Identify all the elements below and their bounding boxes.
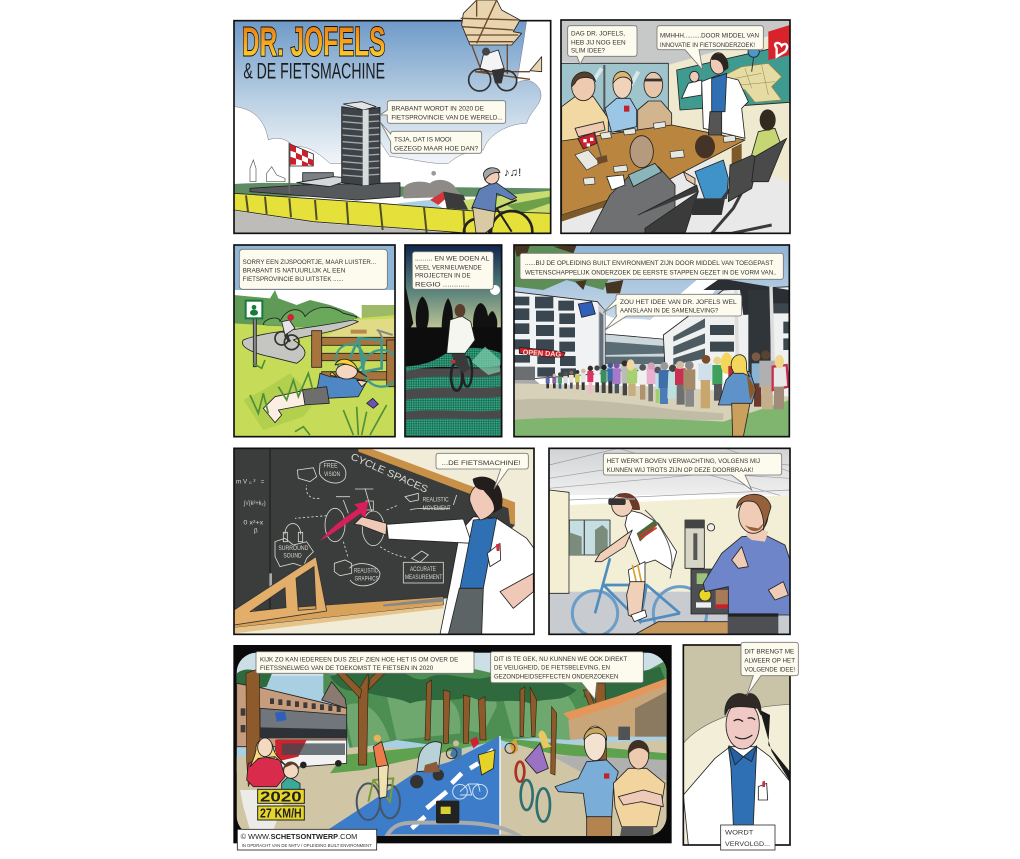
figure: distant cyclist bbox=[275, 314, 299, 350]
cycle highway scene bbox=[237, 653, 667, 837]
speech bubble: zijspoortje: FIETSPROVINCIE BIJ UITSTEK ...... bbox=[243, 276, 343, 283]
speed display: 2020 bbox=[258, 789, 304, 805]
chalk item: free vision: VISION bbox=[324, 471, 340, 478]
white lab coat bbox=[683, 747, 790, 845]
speech bubble: innovatie in fietsonderzoek bbox=[657, 26, 763, 70]
chalk item: realistic graphics bbox=[334, 560, 380, 586]
speech bubble: vernieuwende projecten bbox=[412, 252, 493, 289]
speech bubble: gezondheidseffecten: GEZONDHEIDSEFFECTEN ONDERZOEKEN bbox=[494, 673, 618, 680]
monitor bbox=[691, 569, 730, 614]
name cards on table bbox=[575, 122, 736, 185]
grass and iris flower bbox=[250, 360, 387, 435]
night scene bbox=[405, 245, 502, 437]
speech bubble: gezondheidseffecten bbox=[491, 652, 643, 699]
pink arrow bbox=[320, 501, 368, 541]
chalk formula: mV₀² = bbox=[236, 478, 265, 485]
speech bubble: slim idee: SLIM IDEE? bbox=[571, 48, 605, 55]
speech bubble: vernieuwende projecten: ......... EN WE DOEN AL bbox=[415, 256, 490, 263]
credit box: IN OPDRACHT VAN DE NHTV / OPLEIDING BUILT ENVIRONMENT bbox=[242, 843, 372, 848]
speech bubble: Brabant fietsprovincie: FIETSPROVINCIE VAN DE WERELD... bbox=[391, 114, 503, 121]
table bbox=[562, 125, 745, 215]
panel: title scene with provincial tower bbox=[234, 0, 551, 252]
speech bubble: de fietsmachine: ...DE FIETSMACHINE! bbox=[442, 460, 521, 467]
classroom scene bbox=[234, 448, 534, 634]
map screen bbox=[677, 25, 790, 110]
queue of people bbox=[546, 350, 788, 409]
icon: flying bicycle machine bbox=[461, 0, 542, 91]
figure: blond woman in blue jacket bbox=[718, 355, 756, 437]
panel: glowing road at dusk bbox=[405, 245, 502, 437]
chalk item: accurate measurement bbox=[403, 551, 443, 583]
person: man in back, blue shirt bbox=[683, 135, 772, 233]
panel: Dr. Jofels winking bbox=[683, 642, 798, 850]
speech bubble: vernieuwende projecten: PROJECTEN IN DE bbox=[415, 273, 471, 280]
countryside scene bbox=[234, 245, 400, 437]
chalk formula: ∫√(k²+k₂) bbox=[243, 500, 266, 507]
speech bubble: vernieuwende projecten: VEEL VERNIEUWENDE bbox=[415, 264, 482, 271]
speech bubble: fietssnelweg: KIJK ZO KAN IEDEREEN DUS ZELF ZIEN HOE HET IS OM OVER DE bbox=[260, 656, 459, 663]
chalk item: free vision bbox=[297, 460, 346, 483]
speech bubble: opleiding built environment: ......BIJ DE OPLEIDING BUILT ENVIRONMENT ZIJN DOOR MIDDEL VAN TOEGEPAST bbox=[525, 260, 773, 267]
chalk item: free vision: FREE bbox=[324, 463, 338, 470]
speech bubble: zijspoortje: BRABANT IS NATUURLIJK AL EEN bbox=[243, 268, 346, 275]
chalk item: realistic graphics: GRAPHICS bbox=[355, 575, 379, 582]
desk bbox=[635, 622, 732, 634]
Dr. Jofels at map bbox=[682, 53, 748, 138]
scene background bbox=[234, 21, 551, 252]
panel: fietssnelweg of the future bbox=[233, 645, 672, 850]
figure: man with thumbs up bbox=[703, 494, 790, 634]
blue shirt bbox=[728, 747, 757, 825]
speech bubble: hoe dan: GEZEGD MAAR HOE DAN? bbox=[394, 145, 479, 152]
houses right bbox=[568, 683, 667, 740]
panel: lab test on the bike bbox=[549, 448, 790, 640]
black cockpit frame bbox=[233, 645, 672, 843]
speech bubble: gezondheidseffecten: DIT IS TE GEK, NU KUNNEN WE OOK DIREKT bbox=[494, 656, 627, 663]
chalk item: surround sound: SOUND bbox=[283, 553, 302, 560]
chalk item: realistic movement bbox=[405, 493, 457, 512]
logo sign on building bbox=[578, 302, 595, 317]
panel: open day queue bbox=[514, 245, 789, 437]
speech bubble: gezondheidseffecten: DE VEILIGHEID, DE FIETSBELEVING, EN bbox=[494, 665, 610, 672]
panel: meeting room bbox=[561, 20, 790, 233]
chalk formula bbox=[236, 478, 266, 534]
title: Dr. Jofels: DR. JOFELS bbox=[242, 19, 385, 65]
figure: man in yellow shirt with arms crossed bbox=[613, 740, 665, 837]
handlebar and cycle computer bbox=[387, 801, 520, 837]
ground bbox=[514, 383, 788, 422]
meeting room scene bbox=[561, 20, 790, 233]
far building bbox=[605, 334, 673, 371]
figure: test rider on blue bicycle bbox=[572, 493, 707, 640]
figure: woman and girl on cargo bike bbox=[240, 738, 300, 830]
speech bubble: de fietsmachine bbox=[436, 453, 528, 489]
set square ruler bbox=[234, 557, 327, 625]
credit box bbox=[237, 829, 377, 850]
chalk item: surround sound: SURROUND bbox=[278, 545, 309, 552]
bus bbox=[273, 740, 347, 768]
chalk item: realistic movement: MOVEMENT bbox=[423, 505, 451, 512]
left building bbox=[514, 292, 605, 388]
banner: open dag: OPEN DAG bbox=[523, 348, 562, 359]
panel frame bbox=[234, 21, 551, 233]
campus scene bbox=[514, 245, 789, 437]
subtitle: & de fietsmachine: & DE FIETSMACHINE bbox=[243, 59, 385, 84]
door and wall clock bbox=[685, 520, 715, 568]
coat pocket and pen bbox=[758, 781, 768, 800]
head bbox=[725, 694, 761, 749]
panel: chalkboard Cycle Spaces bbox=[234, 448, 534, 634]
speech bubble: zijspoortje bbox=[239, 249, 387, 289]
speech bubble: slim idee bbox=[568, 26, 637, 64]
speech bubble: doorbraak: KUNNEN WIJ TROTS ZIJN OP DEZE DOORBRAAK! bbox=[607, 467, 753, 474]
ground and grass bbox=[237, 740, 667, 837]
speech bubble: innovatie in fietsonderzoek: INNOVATIE IN FIETSONDERZOEK! bbox=[660, 42, 755, 49]
figure: woman lying in grass bbox=[263, 359, 367, 423]
chalk item: surround sound bbox=[275, 524, 313, 567]
speech bubble: fietssnelweg bbox=[256, 652, 474, 673]
speech bubble: innovatie in fietsonderzoek: MMHHH..........DOOR MIDDEL VAN bbox=[660, 33, 759, 40]
speech bubble: aanslaan in de samenleving: AANSLAAN IN DE SAMENLEVING? bbox=[620, 308, 719, 315]
figure: velomobile rider bbox=[410, 742, 444, 788]
lab scene bbox=[549, 448, 790, 640]
caption: wordt vervolgd: WORDT bbox=[725, 829, 753, 836]
tree trunks bbox=[246, 667, 650, 787]
speech bubble: hoe dan bbox=[381, 123, 482, 153]
credit box: © WWW.SCHETSONTWERP.COM bbox=[241, 832, 357, 841]
chalk item: realistic movement: REALISTIC bbox=[423, 497, 449, 504]
window with view bbox=[569, 520, 610, 555]
wooden fence bbox=[312, 331, 395, 387]
chalk diagram: bicycle and arrows bbox=[295, 485, 407, 558]
speed display: 2020: 2020 bbox=[260, 789, 302, 805]
chalk formula: 0 x²+x bbox=[243, 519, 264, 526]
speech bubble: slim idee: HEB JIJ NOG EEN bbox=[571, 39, 626, 46]
chalk item: realistic graphics: REALISTIC bbox=[354, 567, 378, 574]
speech bubble: aanslaan in de samenleving bbox=[603, 294, 742, 330]
figure: Dr. Jofels on bicycle from behind bbox=[447, 304, 475, 391]
speech bubble: fietssnelweg: FIETSSNELWEG VAN DE TOEKOMST TE FIETSEN IN 2020 bbox=[260, 665, 434, 672]
portrait scene bbox=[683, 645, 790, 845]
icon: teal bicycle bbox=[336, 330, 400, 387]
speech bubble: volgende idee bbox=[741, 642, 798, 696]
speed display: 27 km/h: 27 KM/H bbox=[260, 807, 302, 821]
chalk item: accurate measurement: MEASUREMENT bbox=[405, 574, 442, 581]
figure: cyclist in orange bbox=[357, 735, 400, 820]
speech bubble: doorbraak: HET WERKT BOVEN VERWACHTING, VOLGENS MIJ bbox=[607, 458, 760, 465]
speech bubble: zijspoortje: SORRY EEN ZIJSPOORTJE, MAAR LUISTER... bbox=[243, 259, 376, 266]
speech bubble: volgende idee: VOLGENDE IDEE! bbox=[744, 666, 795, 673]
figure: man in blue shirt gesturing bbox=[555, 726, 618, 837]
chalk item: accurate measurement: ACCURATE bbox=[410, 566, 436, 573]
icon: Brabant checkered flag bbox=[290, 144, 313, 166]
figures: distant cyclists bbox=[446, 737, 518, 762]
caption: wordt vervolgd bbox=[721, 825, 775, 850]
speech bubble: Brabant fietsprovincie bbox=[380, 101, 506, 123]
blue cycle road bbox=[318, 736, 500, 836]
tree canopy bbox=[323, 660, 667, 750]
speech bubble: doorbraak bbox=[603, 453, 782, 490]
speech bubble: Brabant fietsprovincie: BRABANT WORDT IN 2020 DE bbox=[391, 106, 485, 113]
speech bubble: volgende idee: DIT BRENGT ME bbox=[744, 649, 795, 656]
panel: lying in the grass bbox=[234, 245, 400, 437]
person: bald man with glasses bbox=[638, 72, 672, 130]
speech bubble: hoe dan: TSJA, DAT IS MOOI bbox=[394, 136, 452, 143]
speech bubble: aanslaan in de samenleving: ZOU HET IDEE VAN DR. JOFELS WEL bbox=[620, 299, 737, 306]
person: man in yellow shirt bbox=[562, 72, 608, 142]
person: man in back, grey jacket and scarf bbox=[590, 136, 698, 233]
speech bubble: vernieuwende projecten: REGIO ............ bbox=[415, 281, 470, 288]
glowing road bands bbox=[405, 348, 502, 437]
right building bbox=[663, 278, 789, 400]
person: man in green shirt bbox=[752, 109, 787, 182]
chalk formula: β bbox=[254, 527, 258, 534]
light beam on road bbox=[472, 347, 500, 375]
brick building bbox=[237, 682, 347, 747]
speech bubble: opleiding built environment: WETENSCHAPPELIJK ONDERZOEK DE EERSTE STAPPEN GEZET IN DE VORM VAN.. bbox=[525, 269, 777, 276]
music notes: ♪♫! bbox=[504, 167, 521, 179]
chalk heading: Cycle Spaces: CYCLE SPACES bbox=[349, 452, 430, 496]
figure: Dr. Jofels pointing bbox=[354, 477, 534, 634]
caption: wordt vervolgd: VERVOLGD... bbox=[725, 841, 770, 848]
speech bubble: opleiding built environment bbox=[520, 253, 783, 279]
icon: route sign bbox=[246, 301, 262, 367]
figure: cyclist in purple bbox=[516, 730, 552, 822]
speech bubble: slim idee: DAG DR. JOFELS, bbox=[571, 31, 625, 38]
person: man in blue shirt bbox=[605, 71, 637, 132]
small flag on table bbox=[578, 132, 608, 164]
speech bubble: volgende idee: ALWEER OP HET bbox=[744, 657, 795, 664]
figure: cyclist on the fence road bbox=[462, 167, 534, 232]
